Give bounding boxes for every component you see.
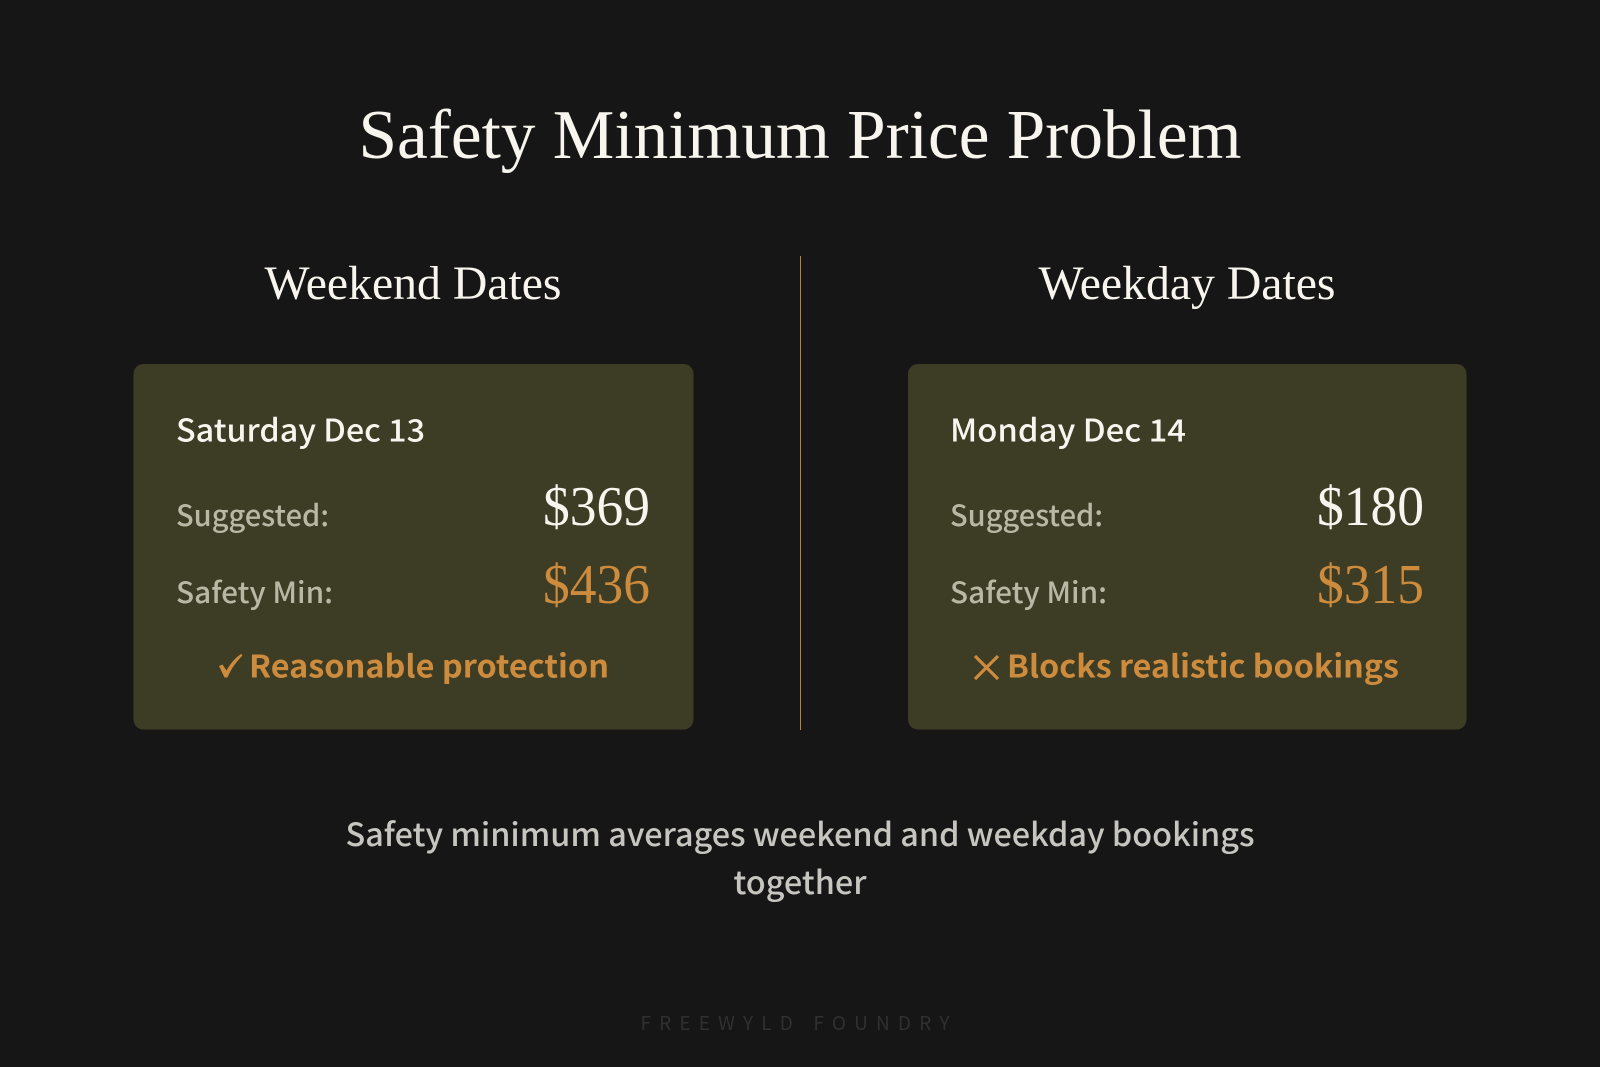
card date: Monday Dec 14 — [950, 406, 1186, 450]
footnote: together — [734, 858, 867, 904]
card: Saturday Dec 13 — [134, 364, 694, 730]
suggested price: $369 — [543, 476, 650, 538]
safety min price: $436 — [543, 554, 650, 616]
title: Safety Minimum Price Problem — [358, 97, 1242, 174]
icon: check mark — [219, 654, 242, 678]
suggested label: Suggested: — [950, 493, 1103, 535]
panel: weekday dates — [908, 257, 1466, 730]
panel: weekend dates — [134, 257, 694, 730]
suggested price: $180 — [1317, 476, 1424, 538]
suggested label: Suggested: — [176, 493, 329, 535]
heading: weekday dates: Weekday Dates — [1038, 257, 1336, 310]
safety min label: Safety Min: — [950, 570, 1107, 612]
status: reasonable protection: Reasonable protection — [249, 642, 609, 686]
card: Monday Dec 14 — [908, 364, 1466, 730]
card date: Saturday Dec 13 — [176, 406, 425, 450]
safety min price: $315 — [1317, 554, 1424, 616]
divider — [800, 256, 801, 730]
footnote — [346, 810, 1254, 904]
footer brand: FREEWYLD FOUNDRY — [640, 1009, 950, 1036]
safety min label: Safety Min: — [176, 570, 333, 612]
footnote: Safety minimum averages weekend and weekday bookings — [346, 810, 1254, 856]
icon: cross mark — [975, 656, 998, 679]
heading: weekend dates: Weekend Dates — [264, 257, 562, 310]
status: blocks realistic bookings: Blocks realistic bookings — [1007, 642, 1399, 686]
